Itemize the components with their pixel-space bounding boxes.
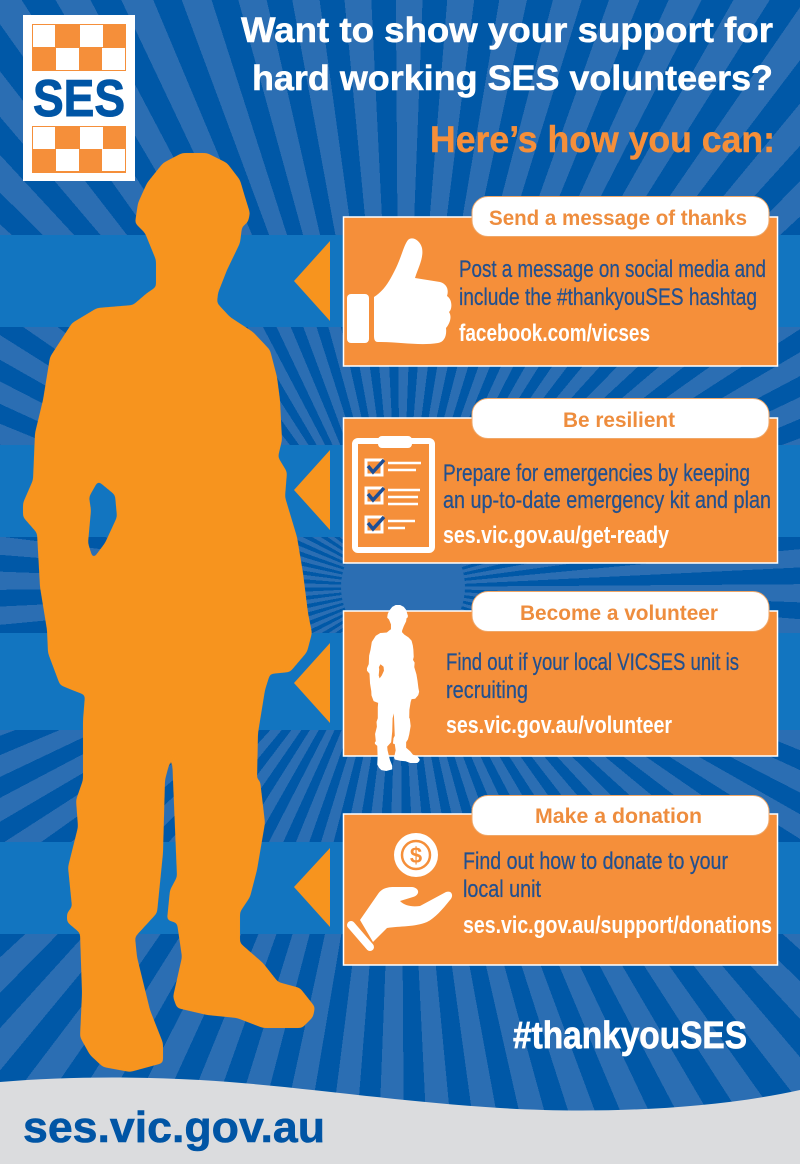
- logo wordmark: SES: [33, 70, 125, 128]
- card body text: [443, 460, 771, 549]
- website URL: ses.vic.gov.au: [23, 1103, 325, 1152]
- card: make a donation: [344, 796, 778, 965]
- SES logo: [23, 15, 135, 181]
- burst centre: [341, 525, 465, 649]
- card body text: facebook.com/vicses: [459, 320, 650, 347]
- icon: thumbs up: [347, 238, 451, 344]
- subtitle: Here’s how you can:: [430, 119, 775, 160]
- card body text: ses.vic.gov.au/volunteer: [446, 712, 672, 739]
- icon: hand with coin: $: [410, 843, 422, 868]
- arrows pointing to silhouette: [294, 241, 330, 927]
- pill heading: Become a volunteer: [520, 602, 718, 625]
- card body text: Find out how to donate to your: [463, 848, 728, 875]
- title: Want to show your support for: [241, 11, 773, 50]
- card body text: recruiting: [446, 677, 528, 704]
- card: become a volunteer: [344, 592, 778, 771]
- pill heading: Send a message of thanks: [489, 207, 747, 230]
- card body text: [459, 256, 766, 347]
- card: send a message of thanks: [344, 196, 778, 366]
- logo checker bottom: [32, 126, 126, 173]
- background bands: [0, 235, 800, 934]
- pill heading: Make a donation: [535, 805, 702, 828]
- pill heading: [472, 592, 769, 632]
- logo checker top: [32, 24, 126, 71]
- icon: clipboard checklist: [355, 436, 432, 550]
- card body text: [463, 848, 772, 939]
- footer wave: [0, 1078, 800, 1164]
- card body text: local unit: [463, 876, 541, 903]
- title: [241, 11, 773, 98]
- pill heading: [472, 796, 769, 836]
- card: be resilient: [344, 398, 778, 563]
- title: hard working SES volunteers?: [252, 59, 773, 98]
- icon: small worker silhouette: [367, 605, 420, 771]
- icon: hand with coin: [351, 833, 452, 947]
- card body text: ses.vic.gov.au/get-ready: [443, 522, 670, 549]
- pill heading: [472, 196, 769, 236]
- pill heading: Be resilient: [563, 409, 675, 432]
- worker silhouette: [23, 153, 315, 1072]
- pill heading: [472, 398, 769, 438]
- card body text: [446, 649, 739, 739]
- hashtag: #thankyouSES: [513, 1015, 747, 1057]
